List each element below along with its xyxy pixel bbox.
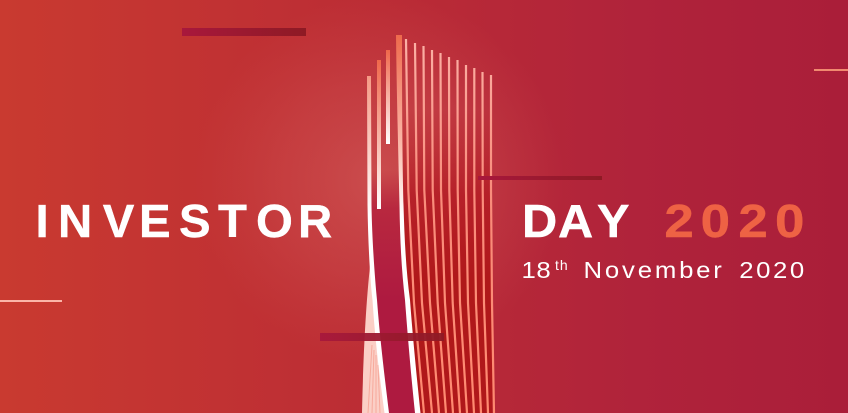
- tower graphic: [362, 35, 494, 413]
- title: day: DAY: [522, 196, 630, 248]
- tower main curved line: [396, 35, 420, 413]
- date: th: [555, 257, 569, 273]
- date: [521, 257, 807, 284]
- date: November: [584, 258, 725, 284]
- tower dark backing: [402, 100, 492, 413]
- tower fan lines: [368, 345, 380, 413]
- tower short bar two: [377, 60, 381, 209]
- tower thin lines: [406, 39, 494, 413]
- tower left curved line: [367, 76, 389, 413]
- bar: top: [182, 28, 306, 36]
- bar: lower: [320, 333, 444, 341]
- date: 18: [521, 258, 551, 284]
- title: year: 2020: [664, 195, 804, 247]
- line: right edge: [814, 69, 848, 71]
- tower crimson band: [370, 170, 417, 413]
- line: left edge: [0, 300, 62, 302]
- bar: middle right: [478, 176, 602, 180]
- title: investor: INVESTOR: [36, 196, 332, 247]
- tower lower fan: [362, 262, 386, 413]
- date: 2020: [739, 258, 807, 284]
- tower short bar three: [386, 50, 390, 144]
